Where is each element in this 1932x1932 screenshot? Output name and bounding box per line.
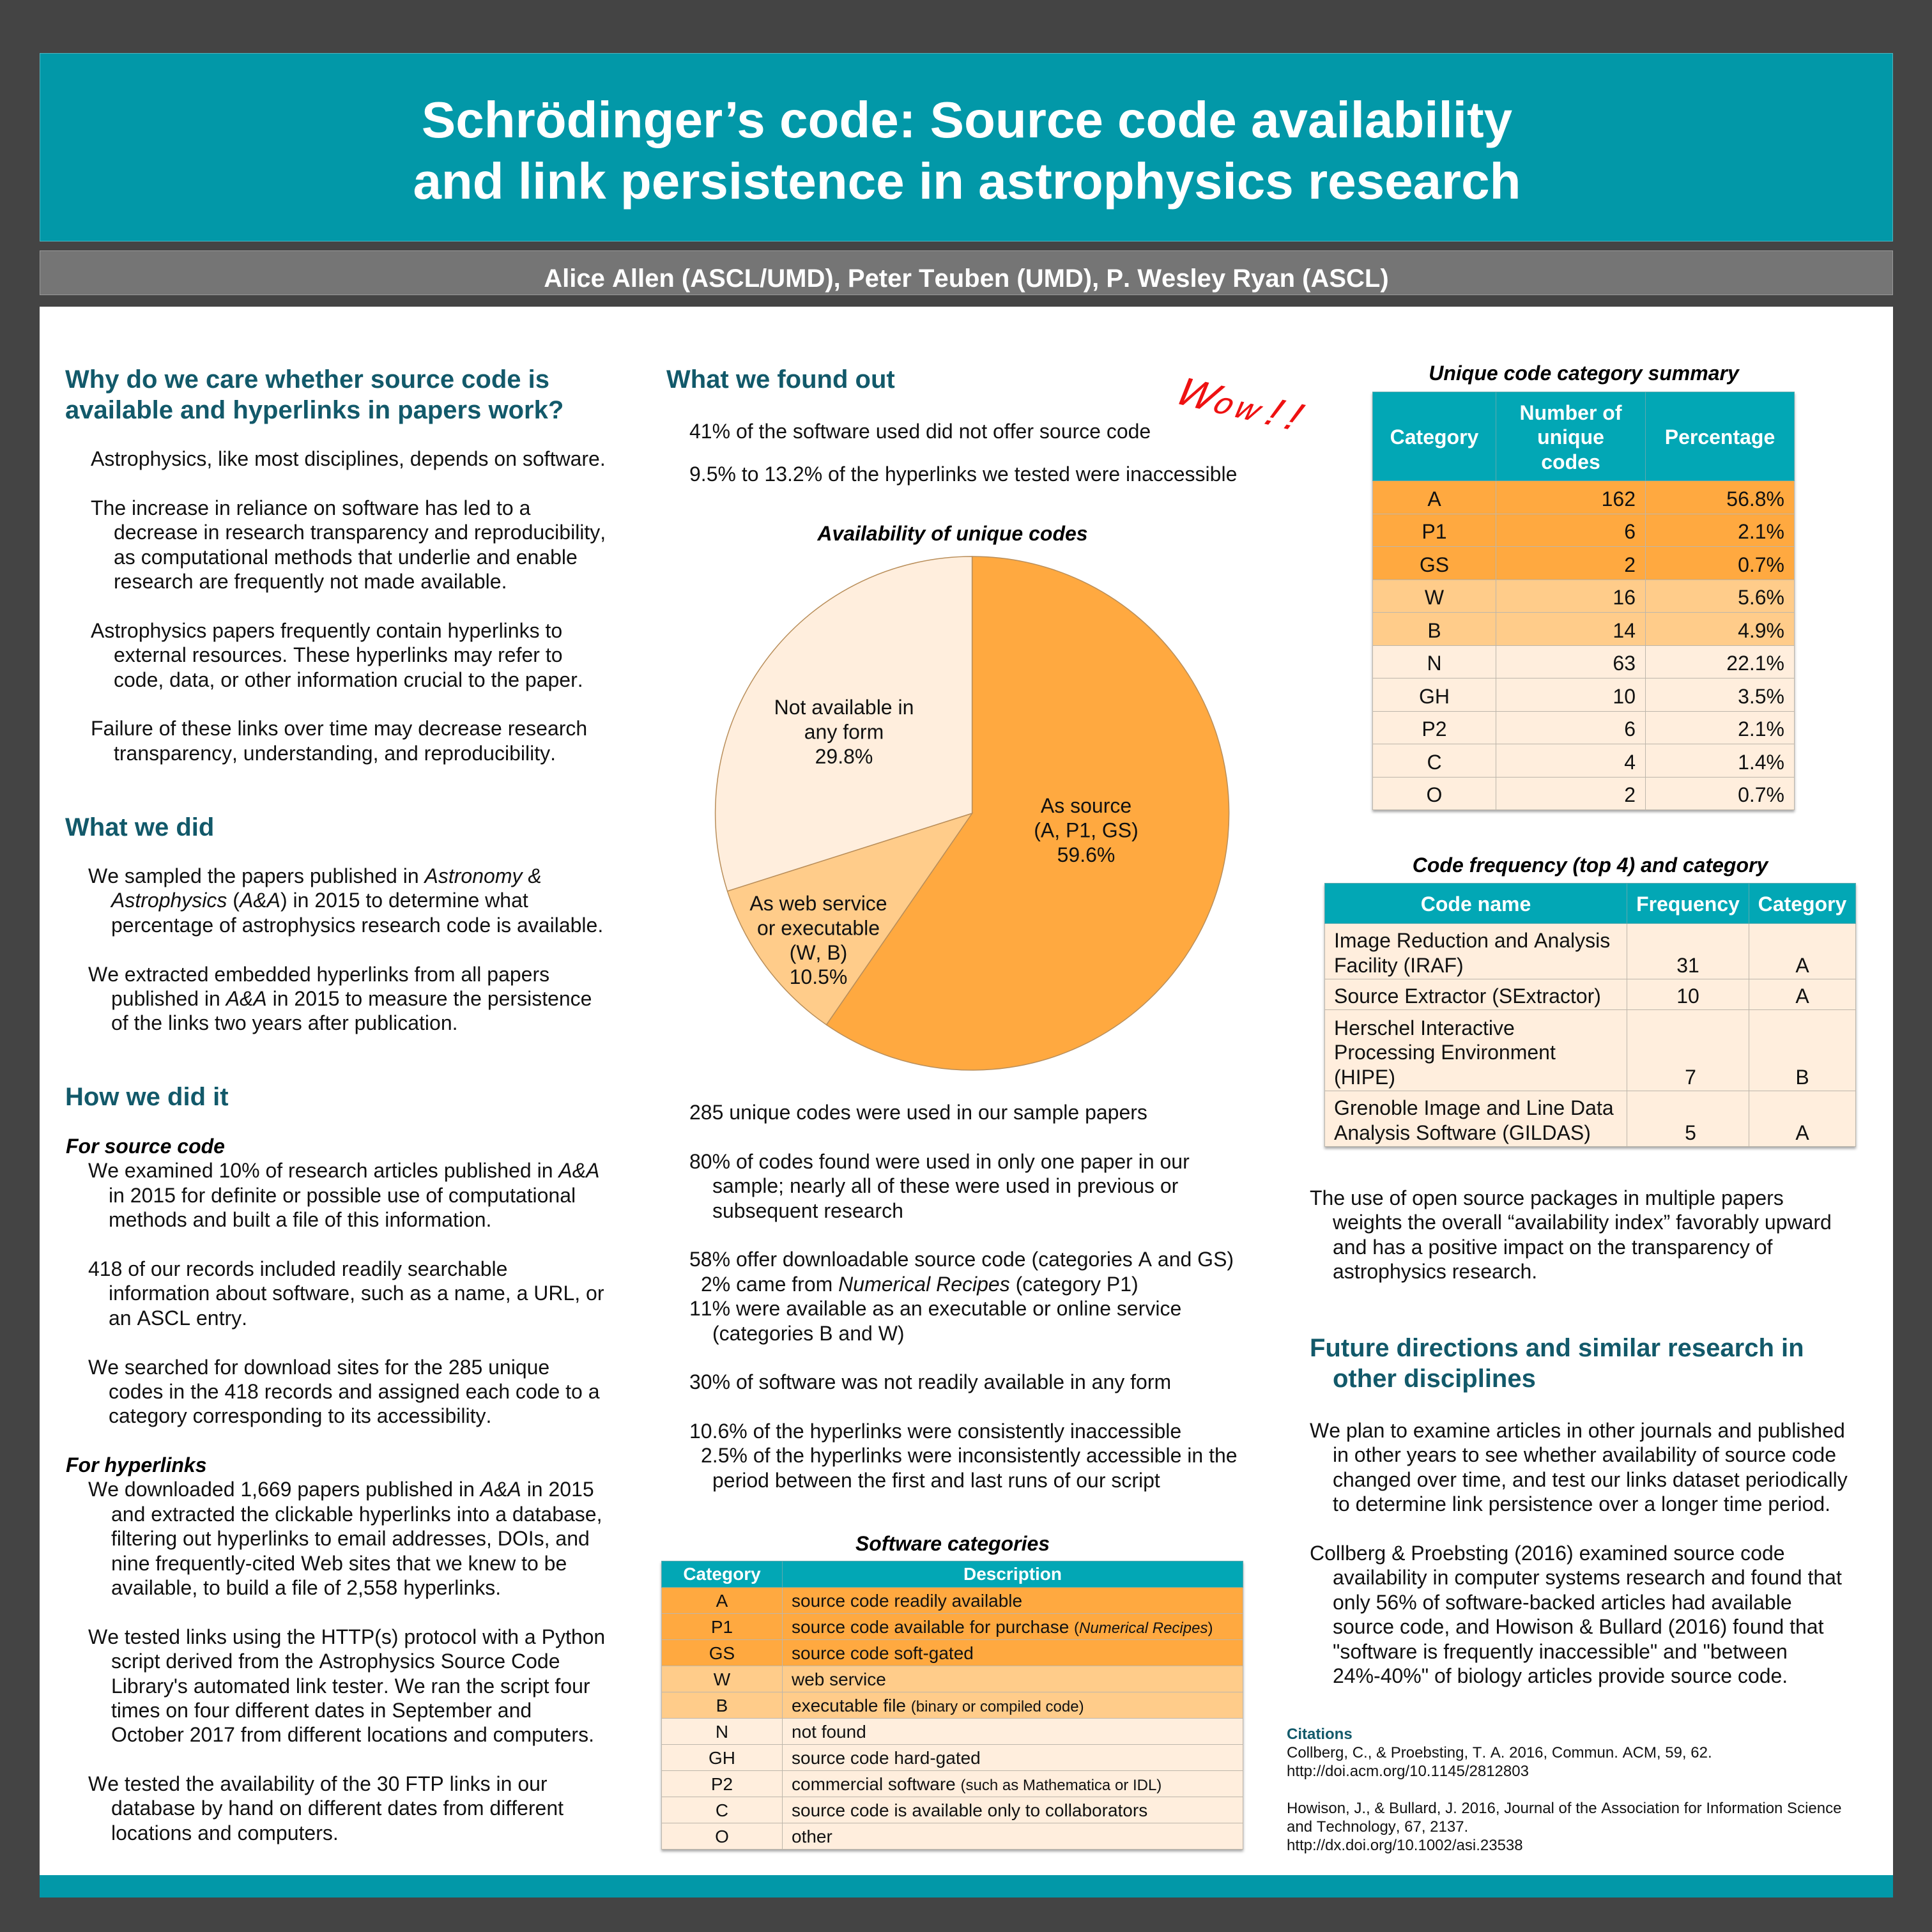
table: unique code category summary: 4.9%: [1738, 619, 1784, 642]
table: unique code category summary: Percentage: [1665, 425, 1775, 448]
text block: key findings: 41% of the software used did not offer source code: [689, 420, 1151, 443]
table: unique code category summary: 0.7%: [1738, 553, 1784, 576]
table: code frequency: Category: [1758, 893, 1846, 916]
table: code frequency: A: [1795, 1121, 1809, 1144]
text block: why do we care: code, data, or other information crucial to the paper.: [114, 668, 583, 691]
table: code frequency: 31: [1676, 954, 1699, 977]
table: code frequency: Processing Environment: [1334, 1041, 1556, 1064]
citations: [1287, 1726, 1841, 1854]
text block: how we did it, source code: in 2015 for definite or possible use of computational: [109, 1184, 576, 1207]
table: unique code category summary: GH: [1419, 685, 1450, 708]
text block: why do we care: [91, 447, 606, 765]
table: code frequency: Herschel Interactive: [1334, 1016, 1515, 1039]
text block: what we did: published in A&A in 2015 to measure the persistence: [111, 987, 592, 1010]
citations: http://doi.acm.org/10.1145/2812803: [1287, 1763, 1529, 1780]
text block: how we did it, source code: We searched for download sites for the 285 unique: [88, 1356, 549, 1379]
text block: key findings: [689, 420, 1237, 486]
text block: how we did it, hyperlinks: Library's automated link tester. We ran the script four: [111, 1675, 590, 1698]
table: unique code category summary: C: [1427, 751, 1442, 774]
table: software categories: other: [792, 1827, 832, 1846]
table: unique code category summary: 10: [1613, 685, 1636, 708]
slice: not available: [716, 556, 972, 891]
table: unique code category summary: 2: [1624, 553, 1636, 576]
text block: future directions: [1310, 1419, 1848, 1687]
panel: title banner: Schrödinger’s code: Source code availability: [422, 91, 1512, 148]
text block: detailed findings: 10.6% of the hyperlinks were consistently inaccessible: [689, 1420, 1181, 1443]
table: unique code category summary: 56.8%: [1726, 487, 1784, 510]
table: unique code category summary: O: [1427, 783, 1442, 806]
table: unique code category summary: 1.4%: [1738, 751, 1784, 774]
table: code frequency: Facility (IRAF): [1334, 954, 1464, 977]
table: unique code category summary: 16: [1613, 586, 1636, 609]
text block: open source impact: astrophysics research.: [1333, 1260, 1537, 1283]
text block: how we did it, hyperlinks: filtering out hyperlinks to email addresses, DOIs, and: [111, 1527, 590, 1550]
pie labels: or executable: [757, 916, 880, 939]
text block: open source impact: [1310, 1186, 1832, 1283]
citations: http://dx.doi.org/10.1002/asi.23538: [1287, 1837, 1523, 1854]
text block: detailed findings: 11% were available as an executable or online service: [689, 1297, 1181, 1320]
table: unique code category summary: P1: [1422, 520, 1447, 543]
text block: open source impact: and has a positive impact on the transparency of: [1333, 1236, 1772, 1259]
text block: detailed findings: 58% offer downloadable source code (categories A and GS): [689, 1248, 1234, 1271]
table: unique code category summary: 22.1%: [1726, 652, 1784, 675]
pie labels: (A, P1, GS): [1034, 818, 1138, 841]
table: code frequency: Analysis Software (GILDAS): [1334, 1121, 1591, 1144]
text block: how we did it, source code: For source code: [66, 1135, 225, 1158]
table: unique code category summary: unique: [1537, 425, 1604, 448]
heading: why do we care: available and hyperlinks in papers work?: [65, 396, 564, 424]
panel: authors bar: [40, 250, 1893, 295]
text block: open source impact: The use of open source packages in multiple papers: [1310, 1186, 1784, 1209]
text block: what we did: We extracted embedded hyperlinks from all papers: [88, 963, 549, 986]
text block: future directions: "software is frequently inaccessible" and "between: [1333, 1640, 1788, 1663]
text block: why do we care: external resources. These hyperlinks may refer to: [114, 643, 563, 666]
text block: detailed findings: period between the first and last runs of our script: [712, 1469, 1160, 1492]
table: unique code category summary: Number of: [1519, 401, 1621, 424]
table: unique code category summary: Category: [1390, 425, 1478, 448]
table: software categories: Description: [963, 1564, 1062, 1584]
text block: how we did it, hyperlinks: nine frequently-cited Web sites that we knew to be: [111, 1552, 567, 1575]
panel: title banner: [40, 53, 1893, 241]
text block: why do we care: decrease in research transparency and reproducibility,: [114, 521, 606, 544]
table: code frequency: A: [1795, 954, 1809, 977]
text block: why do we care: Astrophysics papers frequently contain hyperlinks to: [91, 619, 562, 642]
text block: how we did it, source code: an ASCL entry.: [109, 1307, 247, 1330]
text block: open source impact: weights the overall “availability index” favorably upward: [1333, 1211, 1832, 1234]
pie labels: 59.6%: [1057, 843, 1115, 866]
table: unique code category summary: 0.7%: [1738, 783, 1784, 806]
text block: why do we care: transparency, understanding, and reproducibility.: [114, 742, 556, 765]
table: unique code category summary: 2: [1624, 783, 1636, 806]
text block: detailed findings: (categories B and W): [712, 1322, 905, 1345]
text block: how we did it, hyperlinks: and extracted the clickable hyperlinks into a database,: [111, 1503, 602, 1526]
pie labels: [749, 696, 1138, 988]
chart title: availability: Availability of unique codes: [817, 522, 1088, 545]
table: software categories: source code hard-gated: [792, 1748, 981, 1768]
table: unique code category summary: 162: [1602, 487, 1636, 510]
text block: how we did it, source code: category corresponding to its accessibility.: [109, 1404, 491, 1427]
slice: as source: [827, 556, 1229, 1070]
table: code frequency: B: [1795, 1066, 1809, 1089]
table: software categories: GH: [709, 1748, 735, 1768]
table: code frequency: Code name: [1421, 893, 1531, 916]
table: unique code category summary: A: [1427, 487, 1441, 510]
heading: future directions: other disciplines: [1333, 1365, 1536, 1393]
text block: detailed findings: 80% of codes found were used in only one paper in our: [689, 1150, 1190, 1173]
footer band: [40, 1875, 1893, 1897]
table title: unique code category summary: Unique code category summary: [1429, 362, 1739, 385]
citations: Collberg, C., & Proebsting, T. A. 2016, Commun. ACM, 59, 62.: [1287, 1744, 1712, 1761]
table: unique code category summary: 4: [1624, 751, 1636, 774]
table: code frequency: Image Reduction and Analysis: [1334, 929, 1610, 952]
text block: how we did it, hyperlinks: available, to build a file of 2,558 hyperlinks.: [111, 1576, 501, 1599]
table: software categories: P2: [711, 1774, 733, 1794]
text block: how we did it, hyperlinks: For hyperlinks: [66, 1453, 207, 1476]
heading: what we did: What we did: [65, 813, 214, 841]
text block: future directions: availability in computer systems research and found that: [1333, 1566, 1842, 1589]
table: software categories: N: [716, 1722, 728, 1742]
table: code frequency: Grenoble Image and Line Data: [1334, 1096, 1614, 1119]
text block: how we did it, source code: methods and built a file of this information.: [109, 1208, 491, 1231]
table: software categories: B: [716, 1696, 728, 1715]
text block: how we did it, hyperlinks: script derived from the Astrophysics Source Code: [111, 1650, 560, 1673]
text block: how we did it, hyperlinks: times on four different dates in September and: [111, 1699, 532, 1722]
table: code frequency: Source Extractor (SExtractor): [1334, 985, 1601, 1008]
pie labels: As source: [1041, 794, 1131, 817]
text block: future directions: changed over time, and test our links dataset periodically: [1333, 1468, 1848, 1491]
heading: future directions: Future directions and similar research in: [1310, 1334, 1804, 1362]
panel: title banner: and link persistence in astrophysics research: [413, 153, 1521, 210]
table: unique code category summary: P2: [1422, 717, 1447, 740]
pie labels: any form: [804, 720, 884, 743]
table: software categories: C: [716, 1800, 728, 1820]
text block: future directions: 24%-40%" of biology articles provide source code.: [1333, 1664, 1788, 1687]
text block: detailed findings: 285 unique codes were used in our sample papers: [689, 1101, 1147, 1124]
table title: code frequency: Code frequency (top 4) and category: [1413, 854, 1768, 877]
heading: why do we care: Why do we care whether source code is: [65, 365, 549, 394]
text block: future directions: Collberg & Proebsting (2016) examined source code: [1310, 1542, 1785, 1565]
text block: detailed findings: 30% of software was not readily available in any form: [689, 1370, 1171, 1393]
text block: what we did: We sampled the papers published in Astronomy &: [88, 864, 542, 887]
text block: detailed findings: subsequent research: [712, 1199, 903, 1222]
table: software categories: not found: [792, 1722, 866, 1742]
table: code frequency: A: [1795, 985, 1809, 1008]
text block: what we did: Astrophysics (A&A) in 2015 to determine what: [111, 889, 528, 912]
table: software categories: W: [714, 1669, 730, 1689]
heading: future directions: [1310, 1334, 1804, 1393]
table: software categories: P1: [711, 1617, 733, 1637]
text block: how we did it, hyperlinks: We tested the availability of the 30 FTP links in our: [88, 1772, 548, 1795]
text block: how we did it, hyperlinks: We downloaded 1,669 papers published in A&A in 2015: [88, 1478, 594, 1501]
text block: why do we care: research are frequently not made available.: [114, 570, 507, 593]
text block: detailed findings: 2% came from Numerical Recipes (category P1): [701, 1273, 1138, 1296]
text block: future directions: We plan to examine articles in other journals and published: [1310, 1419, 1845, 1442]
pie chart: availability of unique codes: [714, 556, 1229, 1071]
table: unique code category summary: W: [1425, 586, 1444, 609]
text block: how we did it, hyperlinks: [66, 1453, 605, 1844]
table: unique code category summary: 5.6%: [1738, 586, 1784, 609]
table: software categories: source code is available only to collaborators: [792, 1800, 1147, 1820]
heading: what we found out: What we found out: [666, 365, 895, 394]
table: unique code category summary: 2.1%: [1738, 717, 1784, 740]
table title: software categories: Software categories: [855, 1532, 1050, 1555]
table: software categories: web service: [792, 1669, 886, 1689]
text block: why do we care: as computational methods that underlie and enable: [114, 546, 578, 569]
panel: authors bar: Alice Allen (ASCL/UMD), Peter Teuben (UMD), P. Wesley Ryan (ASCL): [544, 264, 1389, 293]
citations: Citations: [1287, 1726, 1353, 1743]
pie labels: As web service: [749, 892, 887, 915]
text block: what we did: percentage of astrophysics research code is available.: [111, 914, 603, 937]
table: software categories: GS: [709, 1643, 735, 1663]
text block: why do we care: Failure of these links over time may decrease research: [91, 717, 587, 740]
text block: how we did it, hyperlinks: database by hand on different dates from different: [111, 1797, 564, 1820]
text block: key findings: 9.5% to 13.2% of the hyperlinks we tested were inaccessible: [689, 463, 1237, 486]
table: code frequency: [1324, 883, 1856, 1147]
table: unique code category summary: codes: [1541, 450, 1600, 473]
table: software categories: source code available for purchase (Numerical Recipes): [792, 1617, 1213, 1637]
text block: what we did: of the links two years after publication.: [111, 1011, 457, 1034]
table: software categories: executable file (binary or compiled code): [792, 1696, 1084, 1715]
table: software categories: O: [715, 1827, 729, 1846]
table: code frequency: Frequency: [1636, 893, 1740, 916]
text block: why do we care: Astrophysics, like most disciplines, depends on software.: [91, 447, 606, 470]
text block: future directions: to determine link persistence over a longer time period.: [1333, 1492, 1830, 1515]
pie labels: 29.8%: [815, 745, 873, 768]
table: software categories: source code soft-gated: [792, 1643, 974, 1663]
pie labels: Not available in: [774, 696, 914, 719]
text block: why do we care: The increase in reliance on software has led to a: [91, 496, 530, 519]
table: software categories: [661, 1561, 1243, 1850]
text block: how we did it, source code: codes in the 418 records and assigned each code to a: [109, 1380, 600, 1403]
text block: how we did it, hyperlinks: October 2017 from different locations and computers.: [111, 1723, 594, 1746]
text block: how we did it, source code: 418 of our records included readily searchable: [88, 1257, 507, 1280]
table: code frequency: 10: [1676, 985, 1699, 1008]
table: unique code category summary: GS: [1420, 553, 1449, 576]
table: unique code category summary: 6: [1624, 717, 1636, 740]
heading: why do we care: [65, 365, 564, 424]
slice: web service or executable: [727, 813, 972, 1025]
table: unique code category summary: 3.5%: [1738, 685, 1784, 708]
text block: future directions: only 56% of software-backed articles had available: [1333, 1591, 1792, 1614]
text block: detailed findings: sample; nearly all of these were used in previous or: [712, 1174, 1178, 1197]
citations: and Technology, 67, 2137.: [1287, 1818, 1468, 1836]
text block: how we did it, source code: information about software, such as a name, a URL, or: [109, 1282, 604, 1305]
citations: Howison, J., & Bullard, J. 2016, Journal of the Association for Information Science: [1287, 1800, 1841, 1817]
table: unique code category summary: 63: [1613, 652, 1636, 675]
table: software categories: commercial software (such as Mathematica or IDL): [792, 1774, 1162, 1794]
table: software categories: A: [716, 1591, 728, 1611]
heading: how we did it: How we did it: [65, 1083, 229, 1111]
table: code frequency: 5: [1685, 1121, 1696, 1144]
text block: how we did it, source code: [66, 1135, 604, 1427]
pie labels: 10.5%: [790, 965, 847, 988]
text block: future directions: source code, and Howison & Bullard (2016) found that: [1333, 1615, 1823, 1638]
table: unique code category summary: N: [1427, 652, 1442, 675]
text block: detailed findings: 2.5% of the hyperlinks were inconsistently accessible in the: [701, 1444, 1238, 1467]
table: unique code category summary: 6: [1624, 520, 1636, 543]
text block: how we did it, hyperlinks: locations and computers.: [111, 1821, 339, 1844]
text block: detailed findings: [689, 1101, 1238, 1492]
table: code frequency: 7: [1685, 1066, 1696, 1089]
table: unique code category summary: [1372, 392, 1795, 810]
table: code frequency: (HIPE): [1334, 1066, 1395, 1089]
text block: what we did: [88, 864, 603, 1034]
pie labels: (W, B): [790, 941, 847, 964]
table: software categories: Category: [683, 1564, 761, 1584]
text block: how we did it, source code: We examined 10% of research articles published in A&A: [88, 1159, 599, 1182]
text block: future directions: in other years to see whether availability of source code: [1333, 1443, 1836, 1466]
panel: white content background: [40, 307, 1893, 1875]
table: unique code category summary: 14: [1613, 619, 1636, 642]
table: software categories: source code readily available: [792, 1591, 1022, 1611]
table: unique code category summary: B: [1427, 619, 1441, 642]
table: unique code category summary: 2.1%: [1738, 520, 1784, 543]
text block: how we did it, hyperlinks: We tested links using the HTTP(s) protocol with a Python: [88, 1625, 605, 1648]
